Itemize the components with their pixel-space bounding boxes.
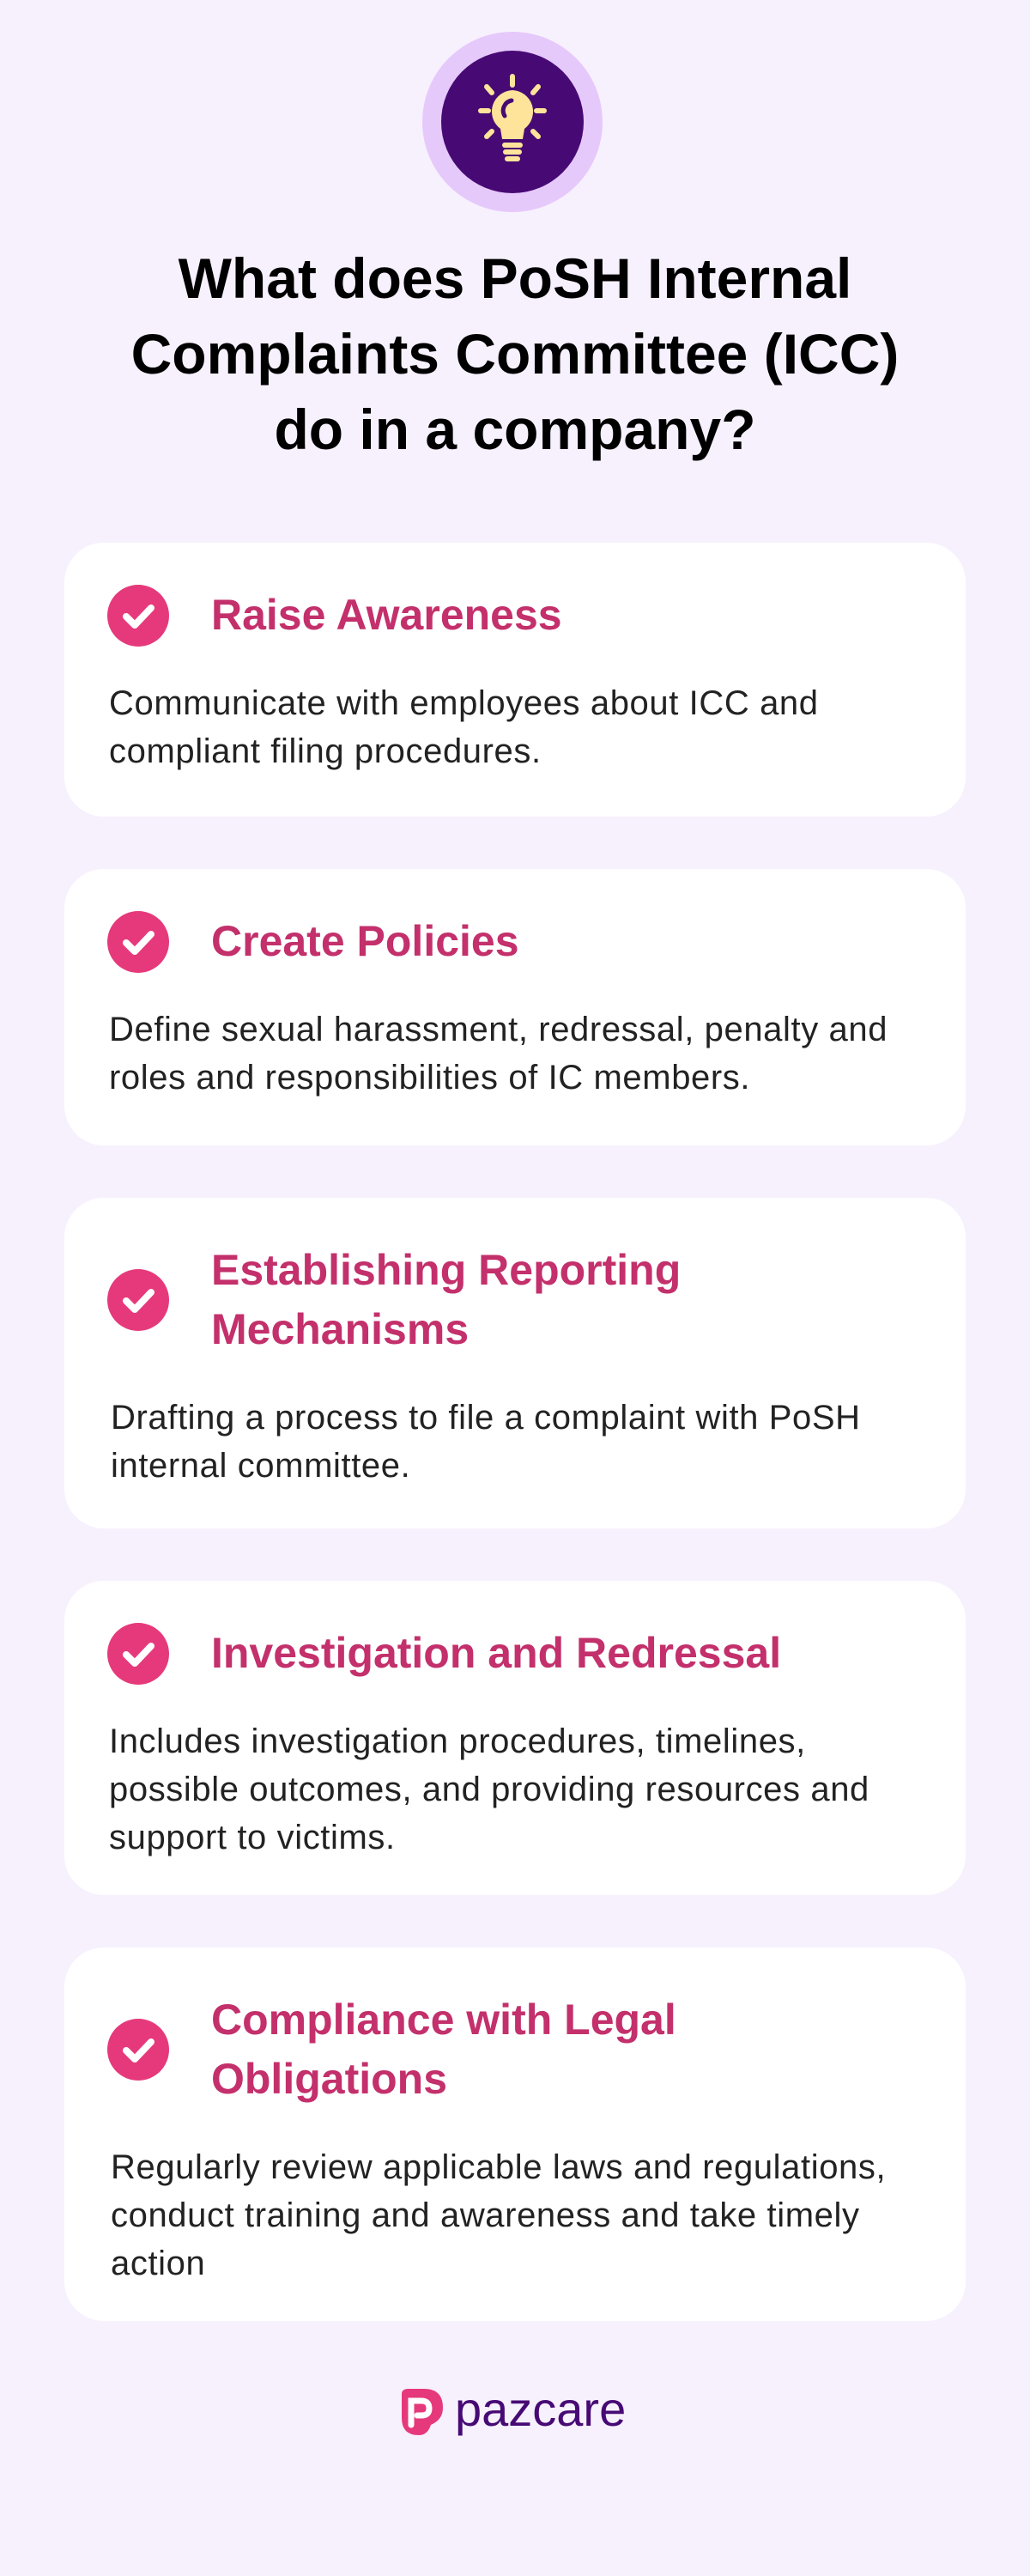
text: Drafting a process to file a complaint with PoSH [111, 1399, 861, 1437]
title: What does PoSH Internal [179, 246, 851, 310]
text [109, 684, 819, 770]
card: Raise Awareness [64, 543, 966, 817]
text [111, 2148, 886, 2282]
heading: Raise Awareness [107, 585, 562, 647]
card: Establishing Reporting Mechanisms [64, 1198, 966, 1528]
heading: Compliance with Legal Obligations [107, 1996, 676, 2103]
icon: lightbulb badge [422, 32, 603, 212]
heading: Establishing Reporting Mechanisms: Establishing Reporting [211, 1246, 681, 1294]
heading: Investigation and Redressal: Investigation and Redressal [211, 1629, 781, 1677]
text [109, 1722, 869, 1856]
card: Compliance with Legal Obligations [64, 1947, 966, 2321]
text [109, 1011, 888, 1097]
text [111, 1399, 861, 1485]
text: Define sexual harassment, redressal, penalty and [109, 1011, 888, 1048]
title: Complaints Committee (ICC) [131, 322, 899, 386]
heading: Create Policies [107, 911, 519, 973]
text: Regularly review applicable laws and regulations, [111, 2148, 886, 2186]
text: Includes investigation procedures, timelines, [109, 1722, 806, 1760]
logo: pazcare [402, 2382, 626, 2436]
heading: Create Policies: Create Policies [211, 917, 519, 965]
wordmark: pazcare [455, 2382, 626, 2436]
card: Investigation and Redressal [64, 1581, 966, 1895]
card: Create Policies [64, 869, 966, 1145]
text: conduct training and awareness and take timely [111, 2196, 860, 2234]
heading: Establishing Reporting Mechanisms: Mechanisms [211, 1305, 469, 1353]
text: Communicate with employees about ICC and [109, 684, 819, 722]
title: do in a company? [274, 398, 756, 461]
text: roles and responsibilities of IC members. [109, 1059, 750, 1097]
icon: pazcare mark [402, 2389, 443, 2435]
text: compliant filing procedures. [109, 732, 542, 770]
text: possible outcomes, and providing resources and [109, 1771, 869, 1808]
text: internal committee. [111, 1447, 410, 1485]
heading: Compliance with Legal Obligations: Compliance with Legal [211, 1996, 676, 2044]
text: action [111, 2245, 205, 2282]
text: support to victims. [109, 1819, 396, 1856]
heading: Establishing Reporting Mechanisms [107, 1246, 681, 1353]
heading: Raise Awareness: Raise Awareness [211, 591, 562, 639]
heading: Compliance with Legal Obligations: Obligations [211, 2055, 447, 2103]
heading: Investigation and Redressal [107, 1623, 781, 1685]
title [131, 246, 899, 461]
